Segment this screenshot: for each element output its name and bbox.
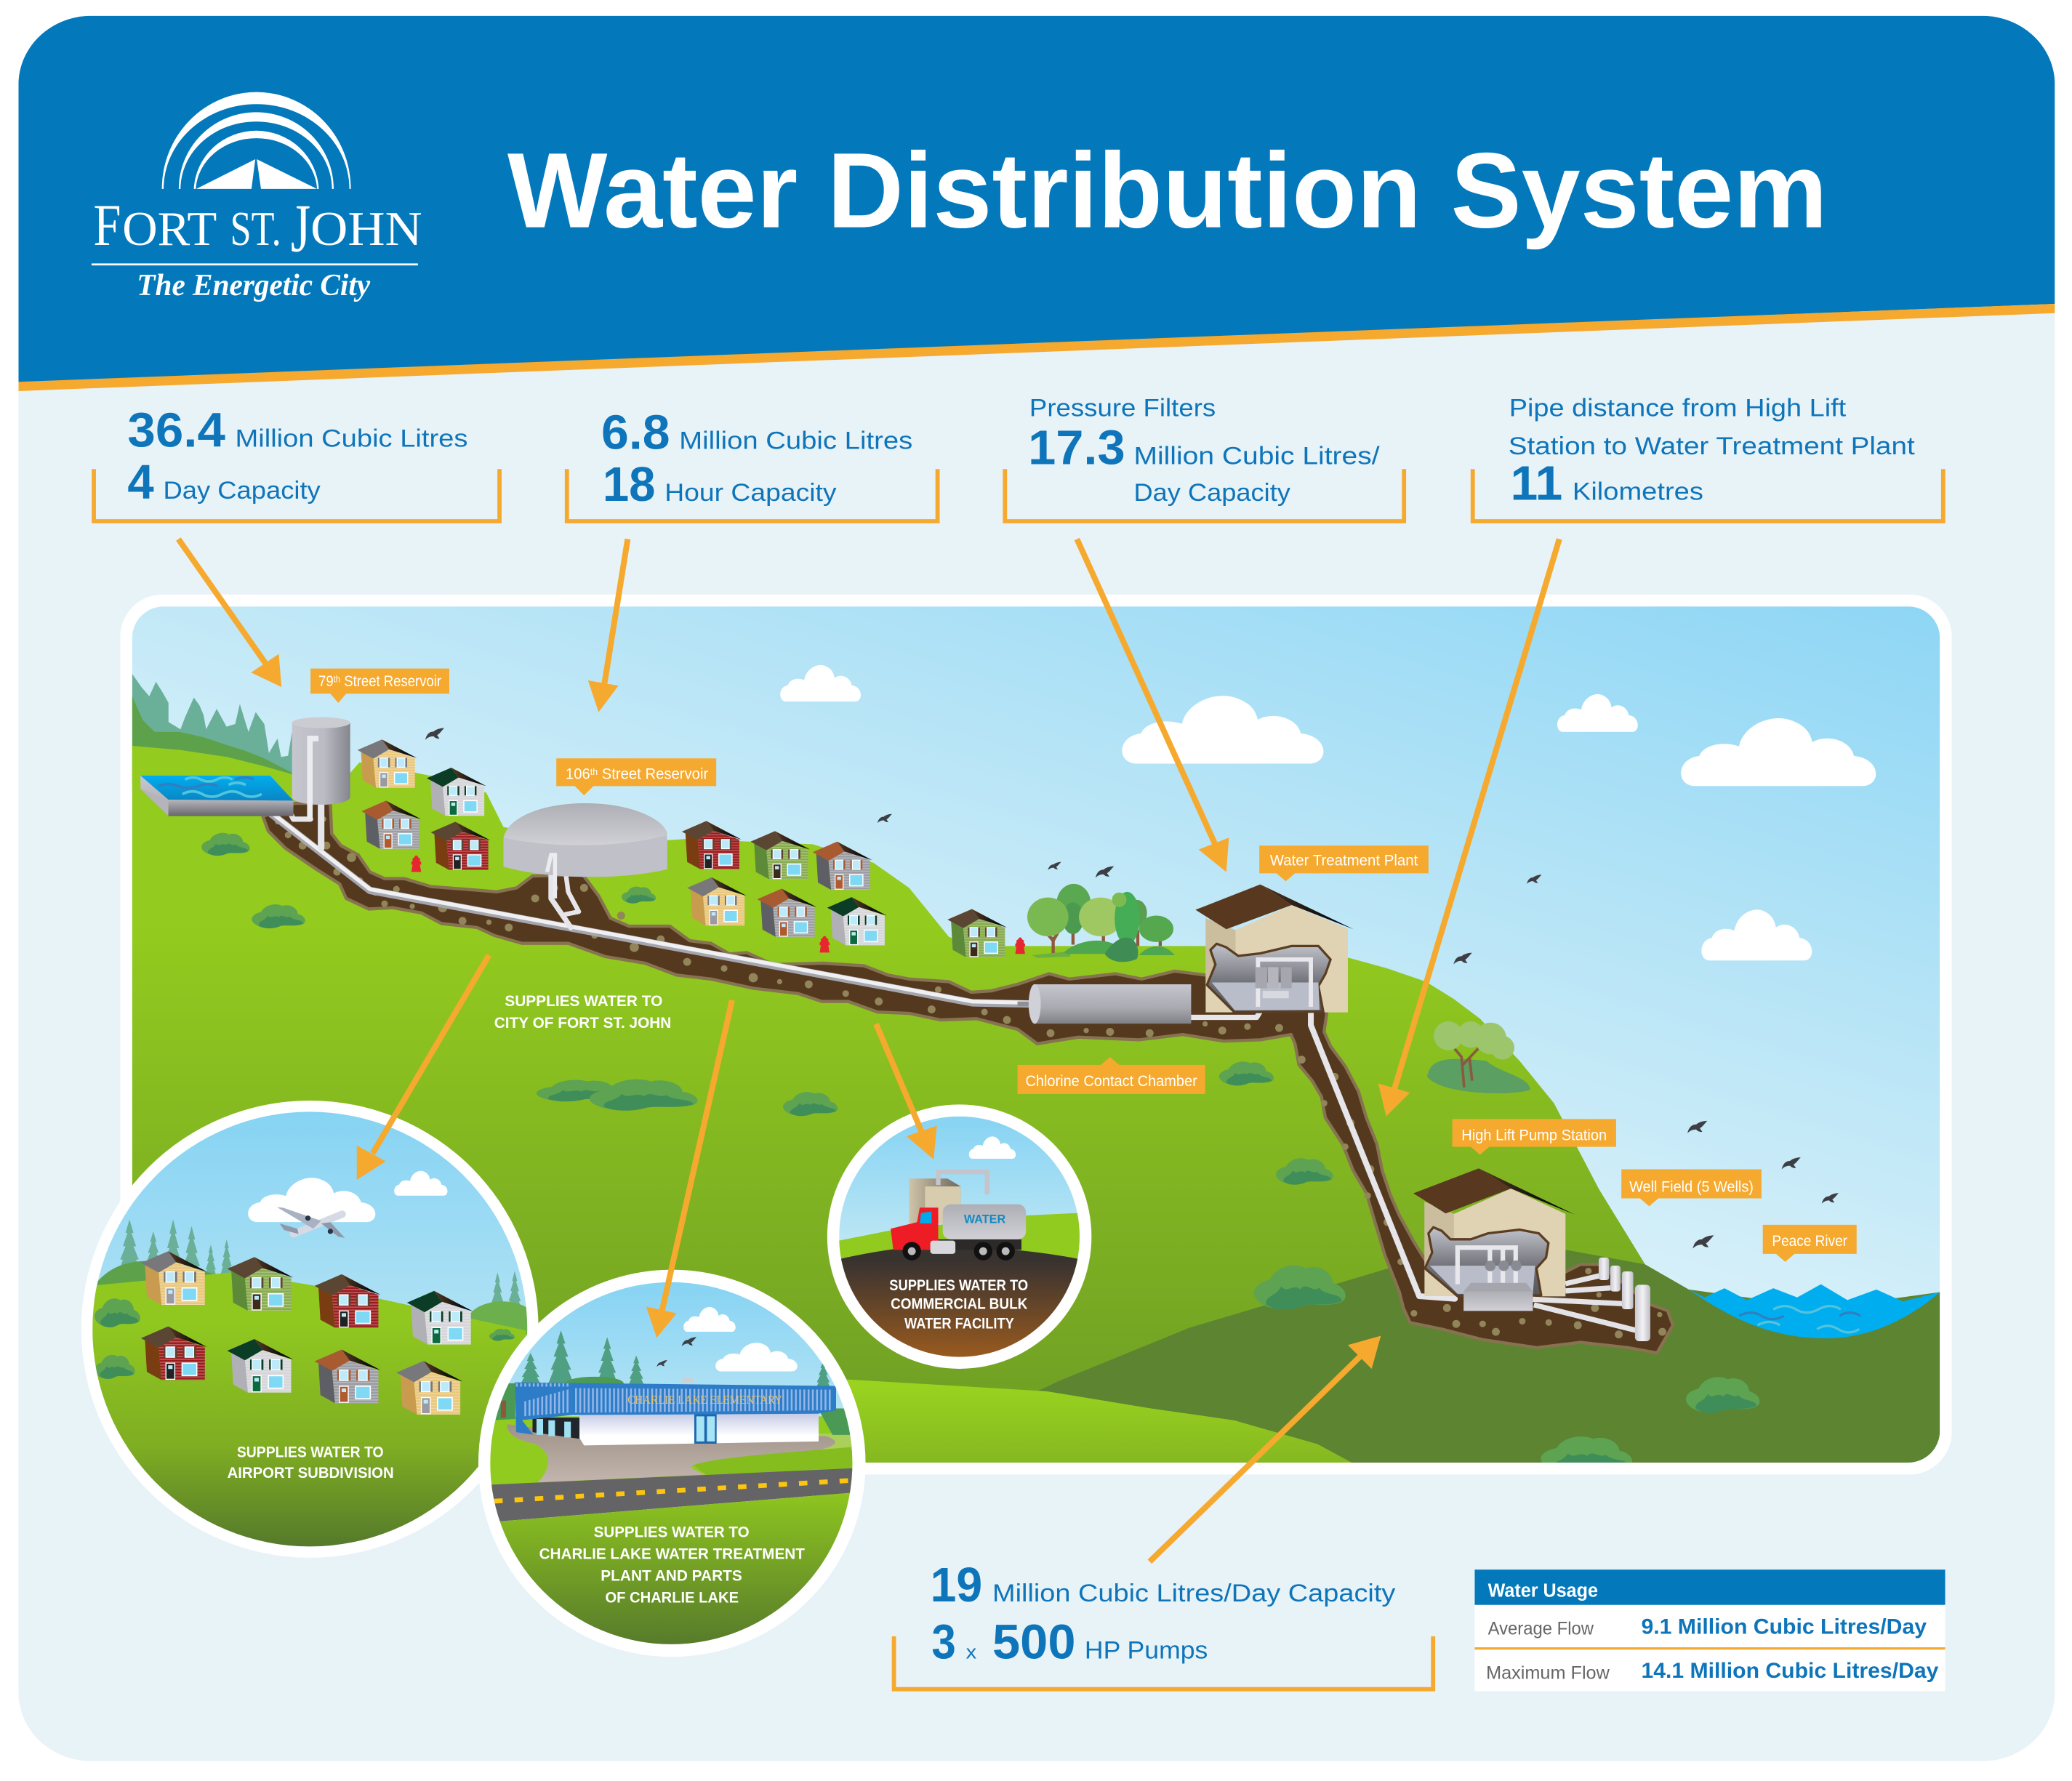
label: 79th Street Reservoir: th (334, 674, 340, 685)
callout: 106th street reservoir stats: 6.8 (601, 405, 670, 459)
logo: Fort St. John: J (291, 190, 310, 266)
truck circle hill (839, 1213, 1080, 1269)
water treatment plant (1195, 885, 1354, 1013)
underground pipe trench (263, 803, 1673, 1353)
road (489, 1468, 855, 1522)
callout: pressure filters stats: Million Cubic Litres/ (1134, 443, 1380, 470)
label: 106th Street Reservoir: th (590, 766, 598, 777)
main water pipes (270, 803, 1455, 1299)
label: 106th Street Reservoir (556, 758, 716, 795)
label: High Lift Pump Station: High Lift Pump Station (1461, 1127, 1607, 1144)
main green hill (132, 746, 1744, 1463)
label: 79th Street Reservoir (310, 669, 449, 703)
arrow: to high lift pump station (1149, 1336, 1381, 1561)
callout: 79th street reservoir stats: Million Cubic Litres (236, 425, 467, 452)
tree cluster (1027, 884, 1175, 962)
airport caption: SUPPLIES WATER TO (237, 1444, 384, 1461)
airport caption (228, 1444, 394, 1482)
water truck: WATER (964, 1213, 1005, 1226)
label: Peace River (1763, 1225, 1857, 1262)
truck caption: COMMERCIAL BULK (891, 1296, 1027, 1313)
arrow: to water treatment plant (1077, 539, 1229, 872)
table: water usage: 14.1 Million Cubic Litres/Day (1641, 1659, 1939, 1683)
orange header stripe (18, 304, 2055, 391)
callout: pipe distance stats (1473, 395, 1943, 521)
dark green lower hill (1004, 1250, 1940, 1463)
table: water usage: 9.1 Million Cubic Litres/Day (1641, 1615, 1927, 1639)
callout: 106th street reservoir stats: Million Cubic Litres (679, 427, 912, 454)
title: Water Distribution System (507, 132, 1828, 251)
inset circle: Charlie Lake (478, 1270, 866, 1657)
trees beside school (491, 1383, 855, 1452)
callout: pump station stats: Million Cubic Litres/Day Capacity (992, 1580, 1396, 1607)
label: Water Treatment Plant: Water Treatment Plant (1270, 852, 1418, 869)
arrow: to pump station pipe (1378, 539, 1559, 1117)
Charlie Lake trees (518, 1330, 832, 1393)
Charlie Lake caption: SUPPLIES WATER TO (594, 1524, 750, 1541)
arrow: to Charlie Lake circle (646, 1000, 732, 1338)
callout: pipe distance stats: Kilometres (1573, 478, 1703, 506)
bushes (201, 833, 1759, 1473)
arrow: to 106th street reservoir (588, 539, 627, 712)
callout: pump station stats: 500 (992, 1615, 1076, 1670)
text: supplies city (494, 993, 671, 1032)
label: 79th Street Reservoir: 79 (318, 673, 335, 690)
airport ground (92, 1272, 529, 1553)
water truck (891, 1205, 1026, 1261)
Charlie Lake caption: OF CHARLIE LAKE (605, 1590, 739, 1607)
logo: Fort St. John: ORT (122, 201, 217, 256)
trench pebbles (275, 816, 1666, 1338)
callout: pressure filters stats: 17.3 (1028, 421, 1125, 475)
label: 106th Street Reservoir: 106 (566, 765, 591, 782)
arrow: to airport circle (357, 955, 489, 1180)
callout: pressure filters stats (1005, 395, 1404, 521)
airport clouds (248, 1171, 447, 1222)
driveway (507, 1424, 835, 1482)
logo: Fort St. John (92, 92, 422, 302)
light green foreground hill (846, 1379, 1352, 1463)
label: 79th Street Reservoir: Street Reservoir (340, 673, 441, 690)
callout: pipe distance stats: 11 (1511, 457, 1562, 511)
label: Water Treatment Plant (1259, 845, 1429, 881)
school building: CHARLIE LAKE ELEMENTARY (627, 1393, 782, 1407)
logo: Fort St. John: F (93, 192, 121, 258)
inset circle: commercial bulk water facility (827, 1104, 1091, 1369)
Charlie Lake clouds (683, 1307, 798, 1372)
logo: Fort St. John: OHN (310, 201, 422, 256)
label: Well Field: Well Field (5 Wells) (1629, 1178, 1754, 1195)
callout: pump station stats: 19 (931, 1558, 982, 1612)
arrow: to truck circle (876, 1024, 937, 1159)
hillside tree (1427, 1021, 1530, 1093)
truck circle ground (839, 1246, 1080, 1361)
79th street reservoir tank (292, 717, 350, 819)
clouds (780, 665, 1876, 960)
callout: pump station stats: 3 (931, 1615, 956, 1670)
callout: 79th street reservoir stats: 36.4 (127, 403, 226, 457)
callout: 106th street reservoir stats: Hour Capacity (664, 479, 837, 507)
forest trees (132, 674, 297, 786)
callout: pipe distance stats: Station to Water Treatment Plant (1509, 433, 1915, 460)
arrow: to 79th street reservoir (178, 539, 281, 687)
label: Peace River: Peace River (1772, 1233, 1847, 1250)
callout: pressure filters stats: Day Capacity (1134, 479, 1291, 507)
table: water usage (1474, 1569, 1945, 1691)
callout: 106th street reservoir stats (567, 405, 938, 521)
airport bushes (95, 1298, 515, 1379)
106th street reservoir (504, 803, 667, 898)
sky (132, 606, 1940, 1463)
callout: pressure filters stats: Pressure Filters (1029, 395, 1216, 422)
Charlie Lake caption: CHARLIE LAKE WATER TREATMENT (539, 1546, 805, 1563)
table: water usage: Water Usage (1488, 1580, 1598, 1601)
houses by 106th street (682, 821, 1007, 957)
callout: pump station stats: HP Pumps (1085, 1637, 1208, 1665)
high lift pump station (1413, 1168, 1575, 1311)
label: 106th Street Reservoir: Street Reservoir (598, 765, 708, 782)
airplane (277, 1207, 345, 1238)
callout: pipe distance stats: Pipe distance from High Lift (1509, 395, 1847, 422)
chlorine contact chamber (1018, 984, 1191, 1024)
truck caption: SUPPLIES WATER TO (889, 1277, 1028, 1294)
school building (515, 1378, 836, 1445)
text: supplies city: CITY OF FORT ST. JOHN (494, 1015, 671, 1032)
river (1689, 1285, 1940, 1338)
text: supplies city: SUPPLIES WATER TO (505, 993, 662, 1010)
truck caption (889, 1277, 1028, 1332)
airport houses (141, 1251, 473, 1415)
Charlie Lake caption (539, 1524, 805, 1607)
label: Chlorine Contact Chamber (1018, 1057, 1205, 1094)
callout: 106th street reservoir stats: 18 (603, 457, 656, 512)
table: water usage: Average Flow (1488, 1619, 1594, 1639)
label: Well Field (1621, 1169, 1762, 1206)
well field pipes (1533, 1258, 1650, 1341)
pool (140, 776, 294, 816)
panel: scene frame (120, 595, 1952, 1474)
label: Chlorine Contact Chamber: Chlorine Contact Chamber (1025, 1073, 1197, 1090)
fire hydrants (411, 856, 1025, 954)
label: High Lift Pump Station (1453, 1119, 1616, 1155)
Charlie Lake lawn (489, 1416, 855, 1495)
header band (18, 16, 2055, 383)
dark hillside behind reservoir (132, 696, 297, 793)
panel: landscape scene (132, 606, 1940, 1473)
callout: 79th street reservoir stats: Day Capacity (163, 477, 321, 504)
Charlie Lake caption: PLANT AND PARTS (601, 1567, 742, 1584)
callout: 79th street reservoir stats (94, 403, 499, 521)
birds near school (656, 1337, 696, 1367)
callout: pump station stats (894, 1558, 1433, 1689)
table: water usage: Maximum Flow (1486, 1663, 1610, 1683)
callout: 79th street reservoir stats: 4 (127, 455, 154, 510)
houses by 79th street (358, 739, 490, 870)
Charlie Lake foreground (491, 1492, 855, 1652)
birds (425, 728, 1839, 1249)
airport trees (116, 1220, 523, 1317)
airport caption: AIRPORT SUBDIVISION (228, 1465, 394, 1482)
logo: Fort St. John: ST. (230, 201, 281, 256)
truck circle cloud (969, 1136, 1016, 1159)
truck caption: WATER FACILITY (904, 1315, 1014, 1332)
callout: pump station stats: x (966, 1641, 977, 1663)
inset circle: airport subdivision (81, 1101, 539, 1558)
storage silo (909, 1172, 987, 1223)
logo: Fort St. John: The Energetic City (137, 269, 371, 302)
